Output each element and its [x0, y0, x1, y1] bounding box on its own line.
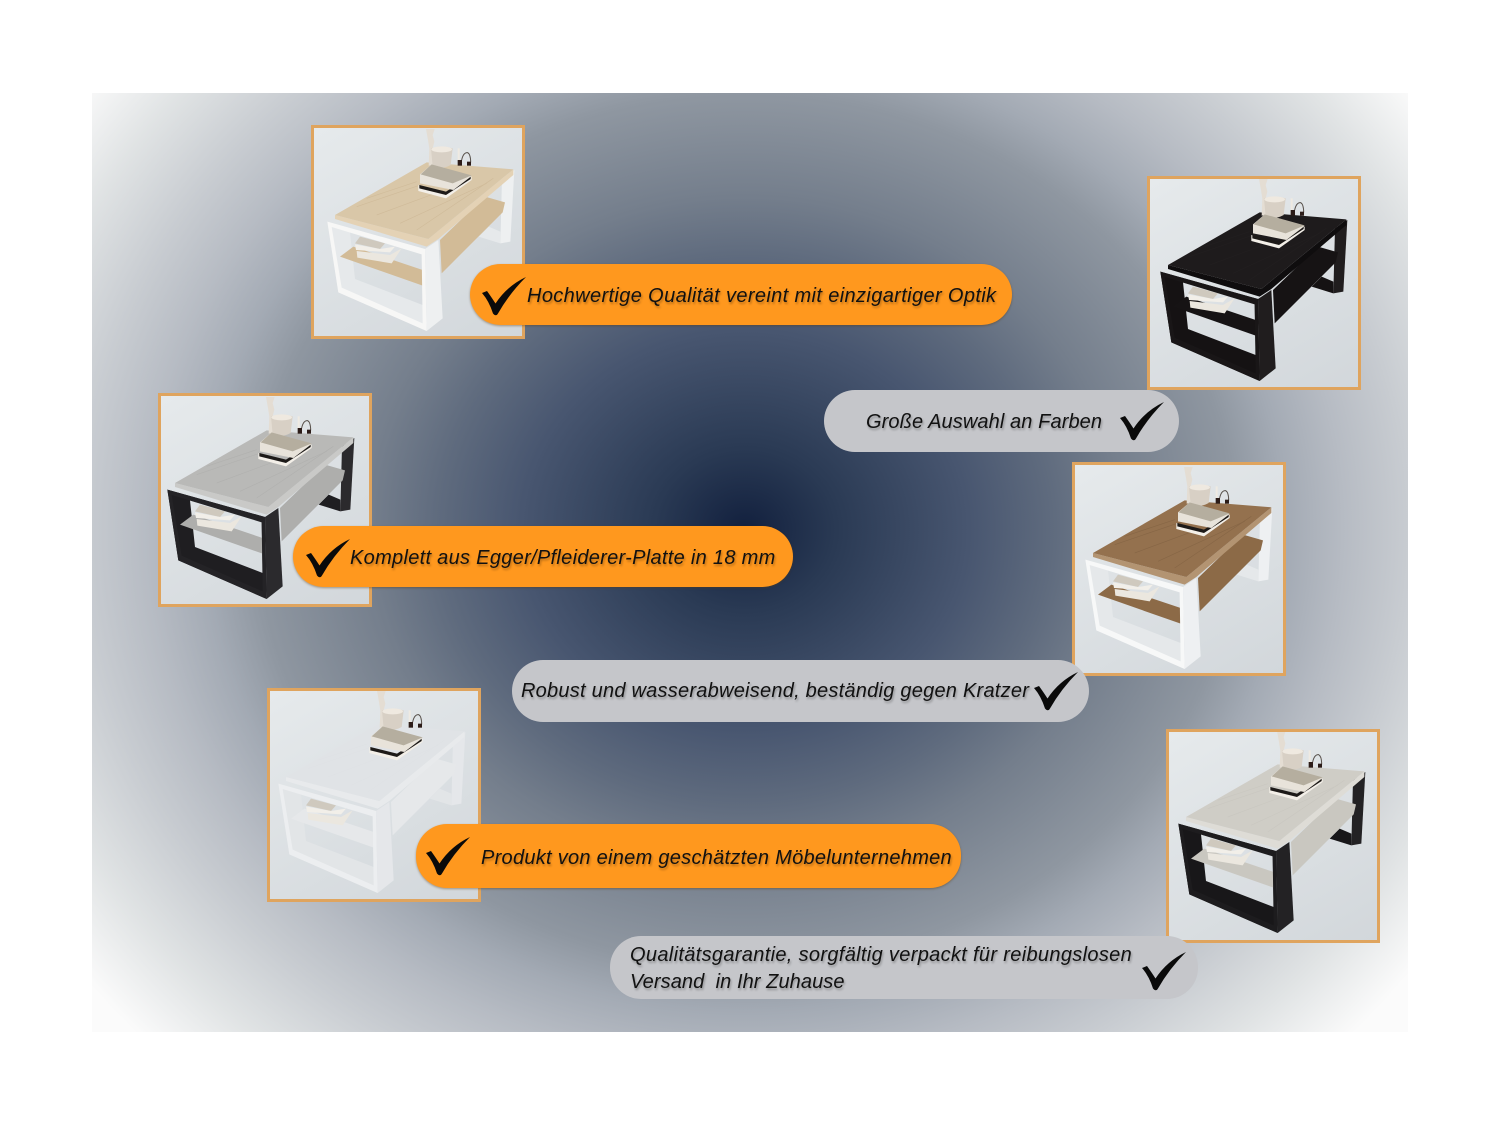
callout text: Qualitätsgarantie, sorgfältig verpackt für reibungslosen	[630, 944, 1132, 966]
callout text: Hochwertige Qualität vereint mit einzigartiger Optik	[527, 285, 996, 307]
callout text: Große Auswahl an Farben	[866, 411, 1102, 433]
icon: check mark	[1142, 952, 1186, 990]
callout: Qualitätsgarantie	[610, 936, 1198, 999]
callout: Hochwertige Qualität	[470, 264, 1012, 325]
callout text	[630, 944, 1133, 993]
callout: Robust und wasserabweisend	[512, 660, 1089, 722]
panel: oak table with white frame	[311, 125, 525, 339]
callout: Komplett aus Egger/Pfleiderer	[293, 526, 793, 587]
callout text: Produkt von einem geschätzten Möbelunternehmen	[481, 847, 952, 869]
icon: check mark	[1034, 672, 1078, 710]
panel: pale concrete table with black frame	[1166, 729, 1380, 943]
panel: concrete table with black frame	[158, 393, 372, 607]
background gradient panel	[92, 93, 1408, 1032]
panel: black table	[1147, 176, 1361, 390]
panel: all white table	[267, 688, 481, 902]
callout: Große Auswahl	[824, 390, 1179, 452]
icon: check mark	[1120, 402, 1164, 440]
callout text: Versand in Ihr Zuhause	[630, 971, 845, 993]
icon: check mark	[482, 277, 526, 316]
icon: check mark	[306, 539, 350, 578]
callout text: Komplett aus Egger/Pfleiderer-Platte in 18 mm	[350, 547, 776, 569]
callout text: Robust und wasserabweisend, beständig gegen Kratzer	[521, 680, 1029, 702]
callout: Produkt von einem geschätzten Möbelunternehmen	[416, 824, 961, 888]
panel: brown oak table with white frame	[1072, 462, 1286, 676]
icon: check mark	[426, 837, 470, 876]
